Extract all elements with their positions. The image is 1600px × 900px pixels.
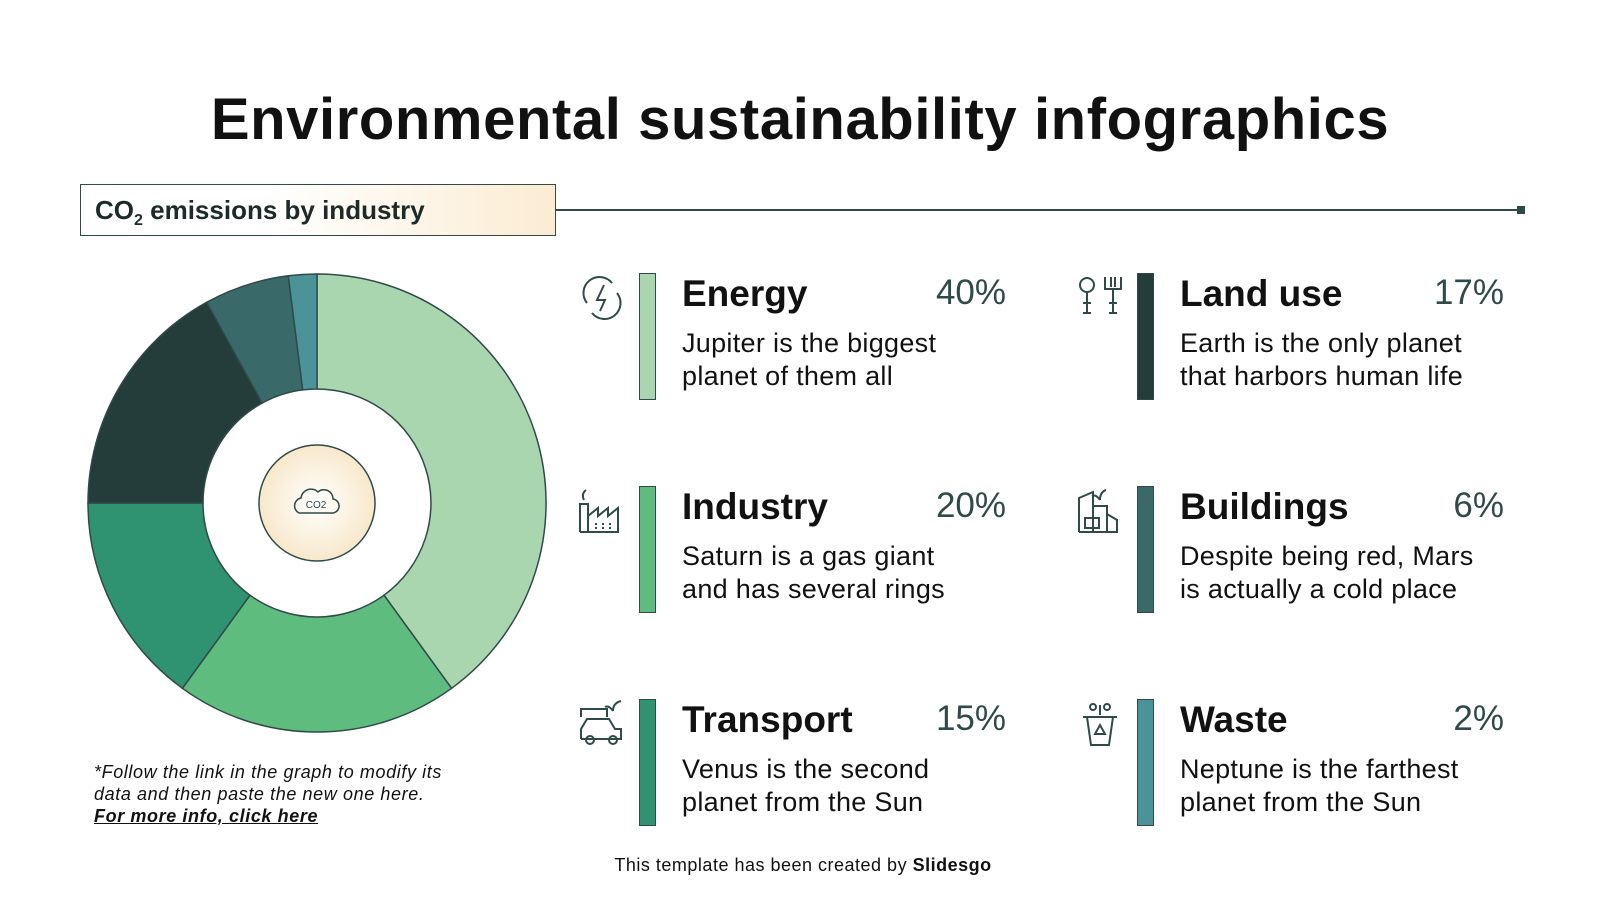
footer credit: This template has been created by Slidesgo	[614, 855, 992, 875]
item: transport: planet from the Sun	[682, 787, 923, 817]
section header box: CO2 emissions by industry	[95, 195, 425, 229]
item: industry: 20%	[936, 486, 1006, 525]
icon: land use	[1079, 277, 1122, 314]
item: waste: 2%	[1453, 699, 1504, 738]
item: transport	[580, 699, 1006, 826]
footnote: *Follow the link in the graph to modify its	[94, 762, 442, 782]
item: land use: Land use	[1180, 273, 1342, 314]
icon: industry	[579, 489, 619, 533]
item: land use: that harbors human life	[1180, 361, 1463, 391]
item: energy: planet of them all	[682, 361, 893, 391]
item: waste: Waste	[1180, 699, 1288, 740]
item: land use	[1079, 273, 1504, 400]
item: transport: 15%	[936, 699, 1006, 738]
segment: buildings 6%	[207, 276, 303, 403]
item: transport: Transport	[682, 699, 853, 740]
item: waste	[1083, 699, 1504, 826]
segment: land use 17%	[88, 302, 262, 503]
item: buildings: Buildings	[1180, 486, 1349, 527]
item: energy: 40%	[936, 273, 1006, 312]
segment: transport 15%	[88, 503, 250, 688]
center co2 badge	[259, 445, 375, 561]
item: energy	[582, 273, 1006, 400]
item: waste: planet from the Sun	[1180, 787, 1421, 817]
segment: energy 40%	[317, 274, 546, 688]
item: buildings	[1078, 486, 1504, 613]
item: industry: Saturn is a gas giant	[682, 541, 934, 571]
item: energy: Energy	[682, 273, 807, 314]
icon: transport	[580, 700, 622, 745]
footnote: data and then paste the new one here.	[94, 784, 424, 804]
segment: industry 20%	[182, 595, 452, 732]
header line with end dot	[556, 206, 1525, 214]
item: transport: Venus is the second	[682, 754, 929, 784]
item: industry: Industry	[682, 486, 828, 527]
segment: waste 2%	[288, 274, 317, 390]
icon: waste	[1083, 703, 1117, 746]
section header box	[80, 184, 556, 236]
item: waste: Neptune is the farthest	[1180, 754, 1459, 784]
item: buildings: 6%	[1453, 486, 1504, 525]
item: buildings: Despite being red, Mars	[1180, 541, 1474, 571]
footnote	[94, 762, 442, 826]
icon: energy	[582, 276, 622, 320]
title: Environmental sustainability infographics	[211, 87, 1389, 152]
item: land use: Earth is the only planet	[1180, 328, 1462, 358]
item: industry: and has several rings	[682, 574, 945, 604]
item: buildings: is actually a cold place	[1180, 574, 1457, 604]
center co2 badge: CO2	[306, 500, 327, 511]
item: energy: Jupiter is the biggest	[682, 328, 936, 358]
icon: buildings	[1078, 489, 1118, 533]
footnote: For more info, click here	[94, 806, 318, 826]
item: land use: 17%	[1434, 273, 1504, 312]
item: industry	[579, 486, 1006, 613]
donut chart	[87, 273, 547, 733]
